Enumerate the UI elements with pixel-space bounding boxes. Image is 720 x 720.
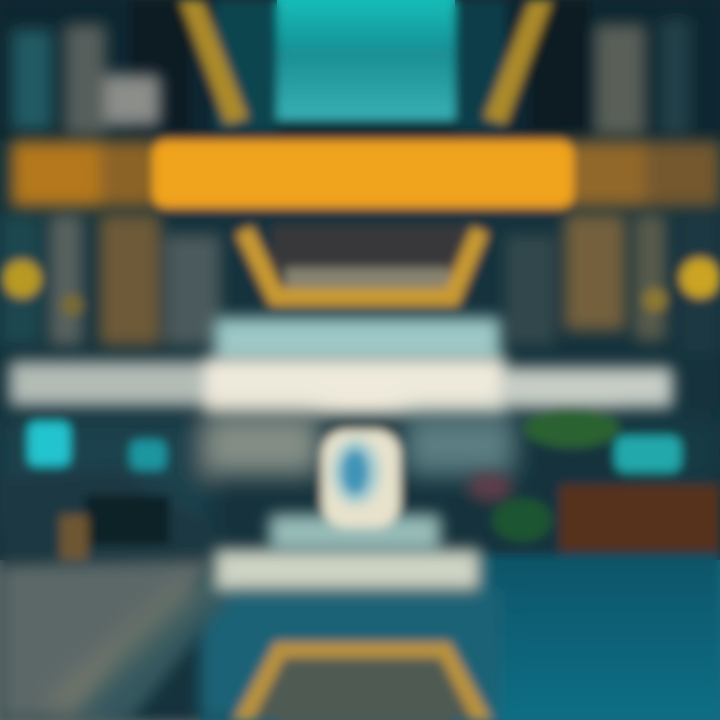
floor darker strip [70,570,235,720]
bottom trapezoid fill [247,650,478,720]
dark left block [85,495,170,545]
orange band, dim full width [12,142,720,206]
left columns [0,25,220,345]
escalators left [0,470,235,565]
brown box [560,485,720,551]
grey floor left [0,560,215,720]
yellow U-shaped frame [244,230,480,297]
teal ceiling panel [277,0,455,120]
portal inner ring [332,439,380,505]
yellow diagonal beams [180,0,552,124]
cyan lights [28,422,681,472]
right columns [505,20,720,355]
dark recess below band [272,225,464,270]
lit panel beneath recess [285,268,450,288]
water right [480,555,720,720]
green plants [492,408,620,542]
orange band, bright centre [152,140,574,208]
orange left accent [60,515,88,560]
red accent [468,473,512,501]
white horizontal band [10,358,672,414]
bottom yellow trapezoid frame [233,642,492,720]
yellow side lights [3,258,720,316]
pale mezzanine [215,318,500,360]
water centre [200,590,500,720]
central white portal [322,430,400,528]
floor light streak [45,575,205,715]
blue oval in portal [341,449,369,495]
pale reflection upper [270,515,440,550]
pale floor reflection [215,550,480,590]
upper wall shading [0,0,720,140]
lower mid-level [0,415,720,530]
